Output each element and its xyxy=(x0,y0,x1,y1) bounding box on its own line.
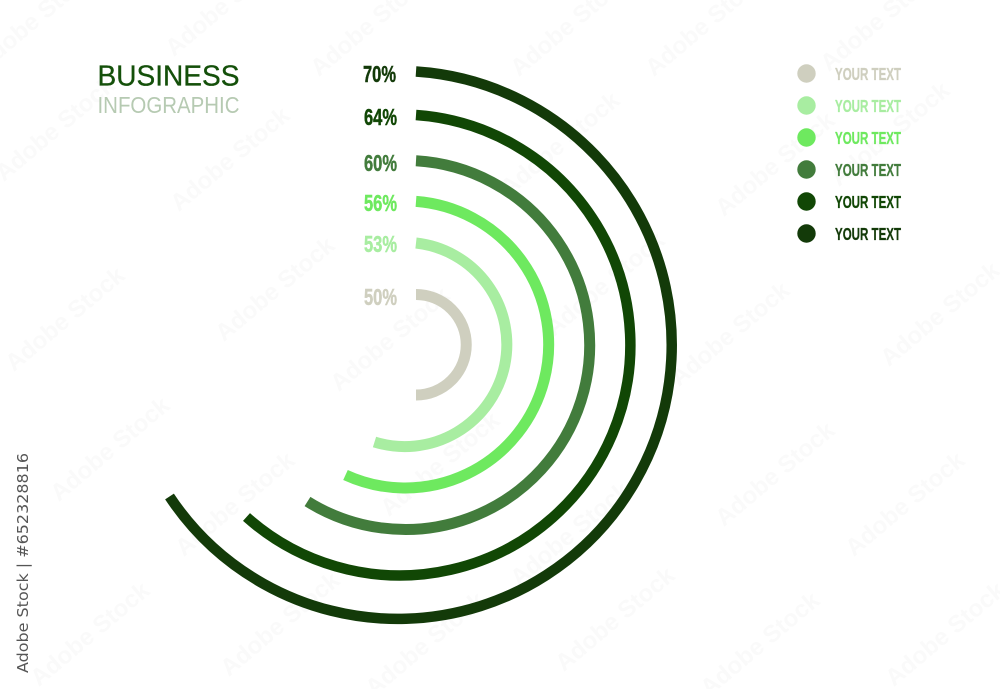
label: 56%: 56% xyxy=(364,190,397,216)
text: Adobe Stock xyxy=(505,476,636,592)
text: Adobe Stock xyxy=(325,281,456,397)
legend item: grey xyxy=(797,64,901,84)
legend item: dark green xyxy=(797,192,901,212)
arc: 70% xyxy=(170,72,672,619)
legend item: bright green: YOUR TEXT xyxy=(835,128,901,148)
legend item: pale green xyxy=(797,96,901,116)
label: 53%: 53% xyxy=(364,231,397,257)
text: Adobe Stock xyxy=(165,101,296,217)
label: 64%: 64% xyxy=(364,104,397,130)
text: Adobe Stock xyxy=(840,446,971,562)
legend item: darkest green xyxy=(797,224,901,244)
subheading: infographic: INFOGRAPHIC xyxy=(98,92,240,118)
legend item: dark green: YOUR TEXT xyxy=(835,192,901,212)
text: Adobe Stock xyxy=(550,561,681,677)
arc: 64% xyxy=(246,115,630,575)
arc: 56% xyxy=(346,201,549,488)
text: Adobe Stock xyxy=(215,566,346,682)
text: Adobe Stock xyxy=(825,76,956,192)
text: Adobe Stock xyxy=(495,86,626,202)
arc: 60% xyxy=(308,161,590,529)
radial bar chart xyxy=(170,72,672,619)
legend item: mid green xyxy=(797,160,901,180)
text: Adobe Stock xyxy=(45,391,176,507)
label: 50%: 50% xyxy=(364,284,397,310)
arc: 53% xyxy=(374,243,507,447)
text: Adobe Stock xyxy=(710,106,841,222)
legend item: grey: YOUR TEXT xyxy=(835,64,901,84)
percentage labels xyxy=(363,61,397,310)
text: Adobe Stock xyxy=(0,261,131,377)
title xyxy=(98,60,240,118)
legend item: pale green: YOUR TEXT xyxy=(835,96,901,116)
legend item: mid green: YOUR TEXT xyxy=(835,160,901,180)
arc: 50% xyxy=(416,294,466,395)
label: 70%: 70% xyxy=(363,61,396,87)
text: Adobe Stock xyxy=(210,231,341,347)
text: Adobe Stock xyxy=(540,226,671,342)
text: Adobe Stock xyxy=(665,276,796,392)
legend xyxy=(797,64,901,244)
text: Adobe Stock xyxy=(375,406,506,522)
stock id side text: Adobe Stock | #652328816 xyxy=(14,453,32,673)
text: Adobe Stock xyxy=(170,446,301,562)
heading: business: BUSINESS xyxy=(98,60,240,92)
legend item: darkest green: YOUR TEXT xyxy=(835,224,901,244)
text: Adobe Stock xyxy=(25,576,156,689)
text: Adobe Stock xyxy=(710,416,841,532)
legend item: bright green xyxy=(797,128,901,148)
label: 60%: 60% xyxy=(364,150,397,176)
